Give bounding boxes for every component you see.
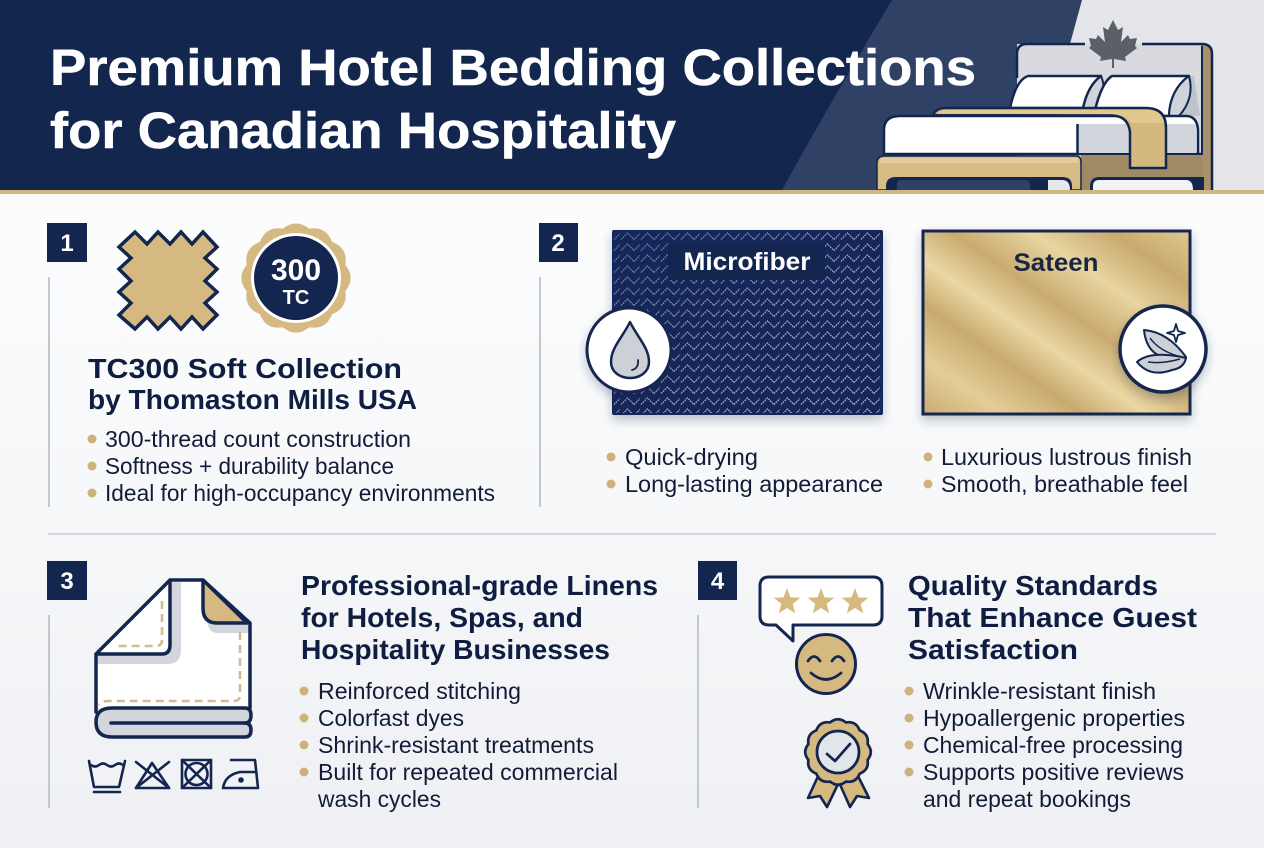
icon: smiley face	[796, 634, 856, 694]
illustration: hotel bed with maple leaf	[877, 20, 1212, 190]
panel 3: professional-grade linens	[47, 561, 658, 812]
bullet list: Supports positive reviews	[923, 759, 1184, 785]
bullet list: Softness + durability balance	[105, 453, 394, 479]
number badge 3: 3	[60, 568, 74, 595]
number badge 1	[47, 223, 87, 262]
bullet list: wash cycles	[317, 786, 441, 812]
heading: for Hotels, Spas, and	[301, 602, 583, 633]
bullets: microfiber	[606, 444, 883, 497]
icon: water drop	[587, 308, 671, 392]
icon: 300 TC seal	[241, 223, 351, 333]
bed base	[877, 155, 1204, 190]
number badge 3	[47, 561, 87, 600]
heading	[908, 570, 1197, 665]
panel 2: fabric comparison	[539, 223, 1206, 507]
bullet list	[300, 678, 618, 812]
heading: by Thomaston Mills USA	[88, 384, 417, 415]
bullet list: 300-thread count construction	[105, 426, 411, 452]
bullet list: and repeat bookings	[923, 786, 1131, 812]
icon: fabric swatch	[119, 232, 217, 329]
icon: do not bleach	[136, 762, 169, 788]
bullet list: Chemical-free processing	[923, 732, 1183, 758]
microfiber card: Microfiber	[684, 248, 811, 276]
pillows	[1010, 76, 1191, 116]
icon: maple leaf	[1089, 20, 1137, 68]
bullets: microfiber: Quick-drying	[625, 444, 758, 470]
number badge 4: 4	[711, 568, 725, 595]
number badge 1: 1	[60, 230, 74, 257]
bullets: sateen	[924, 444, 1192, 497]
heading: That Enhance Guest	[908, 602, 1197, 633]
heading: Professional-grade Linens	[301, 570, 658, 601]
heading: TC300 Soft Collection	[88, 353, 402, 384]
gold throw blanket	[933, 108, 1166, 168]
icon row: laundry care symbols	[89, 760, 258, 792]
number badge 4	[698, 561, 737, 600]
icon: do not tumble dry	[182, 760, 211, 788]
icon: 300 TC seal: 300	[271, 254, 321, 287]
sateen card: Sateen	[1014, 249, 1098, 277]
microfiber card	[612, 230, 883, 415]
headboard	[1017, 44, 1212, 190]
bullet list: Ideal for high-occupancy environments	[105, 480, 495, 506]
title	[50, 39, 976, 159]
bullet list: Colorfast dyes	[318, 705, 464, 731]
bullet list: Hypoallergenic properties	[923, 705, 1185, 731]
icon: wash tub	[89, 761, 125, 792]
mattress	[884, 116, 1202, 155]
title: Premium Hotel Bedding Collections	[50, 39, 976, 96]
panel 1: TC300 Soft Collection	[47, 223, 495, 507]
sateen card	[923, 231, 1190, 414]
number badge 2: 2	[551, 230, 565, 257]
section divider	[48, 533, 1216, 535]
heading	[88, 353, 417, 415]
bullets: sateen: Smooth, breathable feel	[941, 471, 1188, 497]
icon: folded towel	[96, 580, 251, 737]
bullet list: Built for repeated commercial	[318, 759, 618, 785]
bullet list: Reinforced stitching	[318, 678, 521, 704]
number badge 2	[539, 223, 578, 262]
icon: 300 TC seal: TC	[283, 287, 309, 309]
icon: award rosette	[805, 719, 871, 807]
heading: Satisfaction	[908, 634, 1078, 665]
bullet list	[88, 426, 495, 506]
bullets: sateen: Luxurious lustrous finish	[941, 444, 1192, 470]
heading: Quality Standards	[908, 570, 1158, 601]
panel 4: quality standards	[698, 561, 1197, 812]
bullet list: Wrinkle-resistant finish	[923, 678, 1156, 704]
bullet list: Shrink-resistant treatments	[318, 732, 594, 758]
bullets: microfiber: Long-lasting appearance	[625, 471, 883, 497]
icon: iron	[223, 760, 258, 788]
header banner	[0, 0, 1264, 194]
heading	[301, 570, 658, 665]
heading: Hospitality Businesses	[301, 634, 610, 665]
bullet list	[904, 678, 1185, 812]
title: for Canadian Hospitality	[50, 102, 677, 159]
icon: speech bubble with stars	[760, 577, 882, 641]
icon: silky leaf and sparkle	[1120, 306, 1206, 392]
